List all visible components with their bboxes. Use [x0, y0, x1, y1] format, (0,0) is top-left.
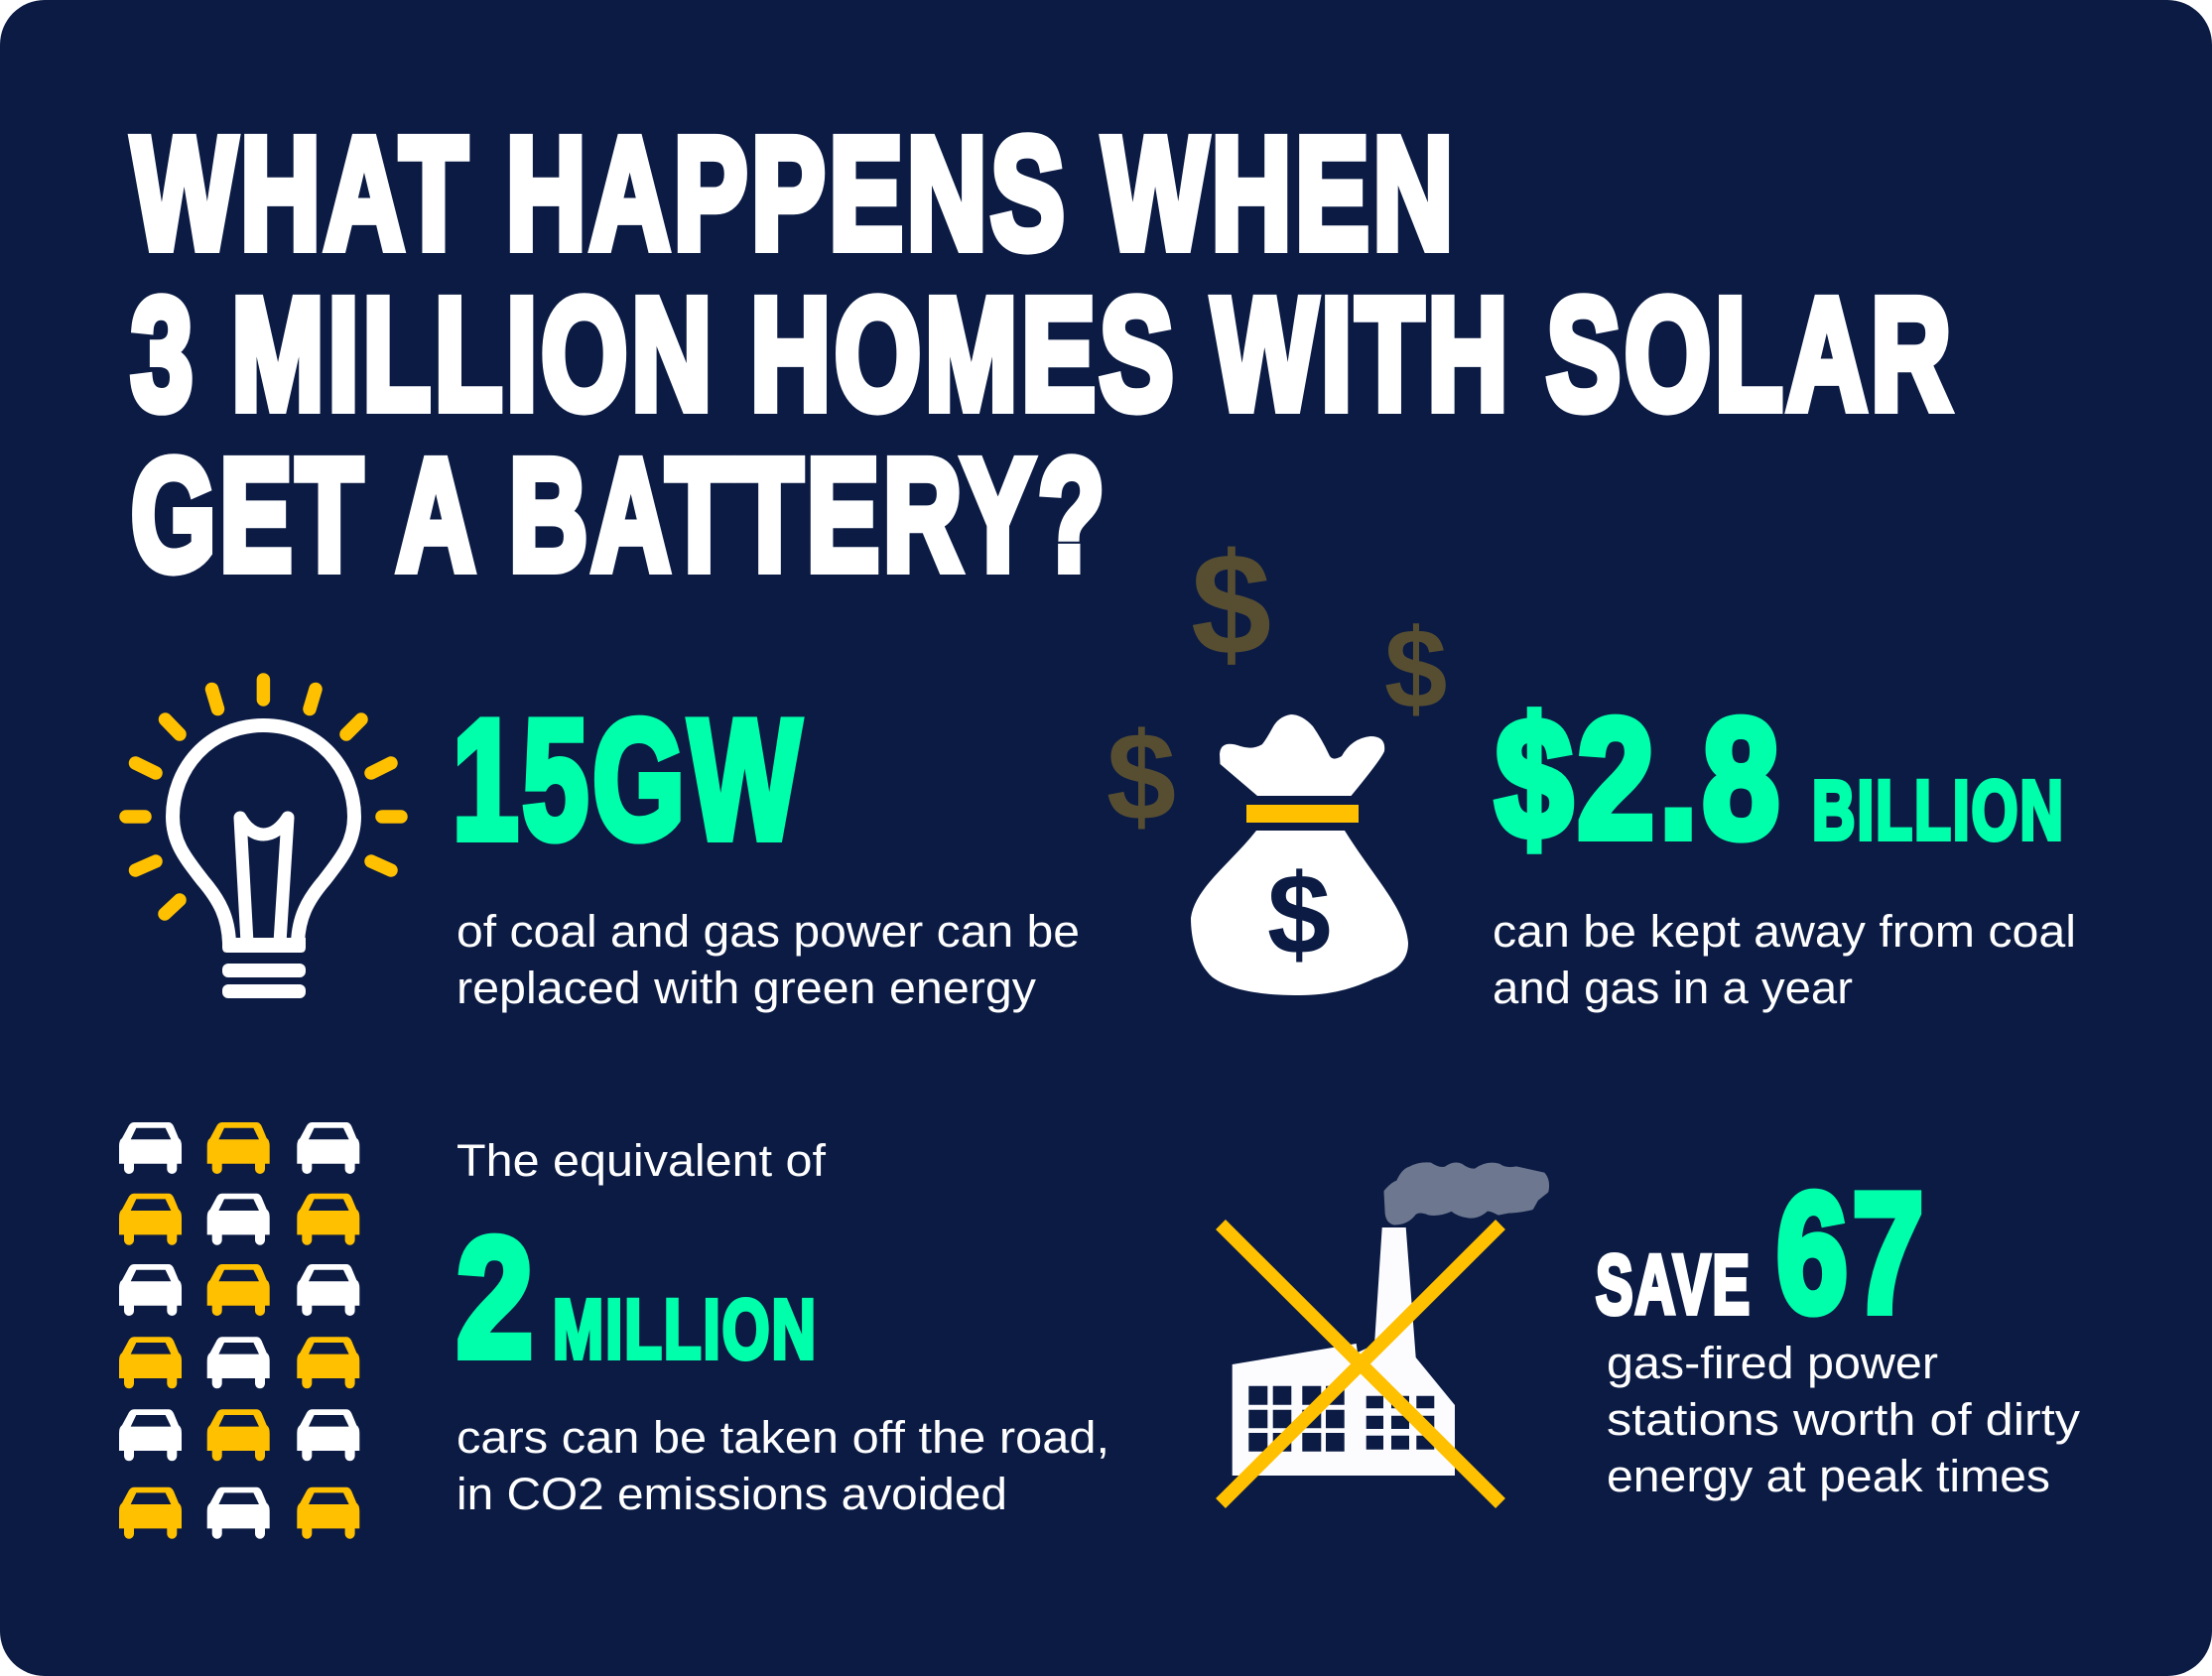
- text: cars off the road: cars can be taken off the road,: [456, 1412, 1109, 1463]
- stat: $2.8: $2.8: [1496, 685, 1784, 873]
- icon: floating dollar signs: $: [1191, 523, 1271, 685]
- icon: light bulb: [126, 680, 401, 998]
- money bag top: [1220, 714, 1384, 796]
- title: WHAT HAPPENS WHEN: [132, 104, 1457, 282]
- stat: 2: 2: [456, 1203, 538, 1393]
- text: gas-fired power stations: gas-fired power: [1607, 1338, 1938, 1388]
- icon: floating dollar signs: $: [1384, 606, 1447, 732]
- text: gas-fired power stations: [1607, 1338, 2081, 1501]
- stat: billion: BILLION: [1812, 764, 2065, 857]
- title: [131, 104, 1955, 603]
- money bag body: [1191, 831, 1408, 995]
- text: cars off the road: [456, 1412, 1109, 1519]
- text: coal and gas power: [456, 906, 1080, 1013]
- text: gas-fired power stations: energy at peak times: [1607, 1451, 2050, 1501]
- text: coal and gas power: of coal and gas power can be: [456, 906, 1080, 957]
- icon: bulb rays: [126, 680, 401, 914]
- money bag band: [1246, 805, 1359, 823]
- money bag dollar sign: $: [1267, 851, 1331, 978]
- icon: floating dollar signs: [1106, 523, 1447, 846]
- gold cross: [1221, 1225, 1500, 1503]
- icon: bulb glass: [173, 725, 354, 943]
- icon: grid of cars: [119, 1122, 359, 1539]
- text: kept away from coal and gas: [1493, 906, 2076, 1013]
- text: coal and gas power: replaced with green energy: [456, 963, 1037, 1013]
- text: cars off the road: in CO2 emissions avoided: [456, 1469, 1007, 1519]
- icon: bulb base: [222, 938, 306, 998]
- text: kept away from coal and gas: can be kept away from coal: [1493, 906, 2076, 957]
- icon: floating dollar signs: $: [1106, 707, 1176, 846]
- stat: 15GW: 15GW: [453, 685, 805, 875]
- factory smoke: [1386, 1165, 1547, 1223]
- icon: bulb filament: [240, 818, 288, 943]
- text: the equivalent of: The equivalent of: [456, 1135, 827, 1186]
- text: kept away from coal and gas: and gas in a year: [1493, 963, 1853, 1013]
- stat: 67: 67: [1776, 1159, 1928, 1348]
- text: save: SAVE: [1596, 1238, 1752, 1332]
- stat: million: MILLION: [553, 1282, 818, 1375]
- icon: crossed-out factory: [1221, 1165, 1547, 1503]
- icon: money bag: [1191, 714, 1408, 995]
- factory building: [1233, 1227, 1455, 1476]
- title: GET A BATTERY?: [131, 426, 1108, 603]
- text: gas-fired power stations: stations worth of dirty: [1607, 1394, 2081, 1445]
